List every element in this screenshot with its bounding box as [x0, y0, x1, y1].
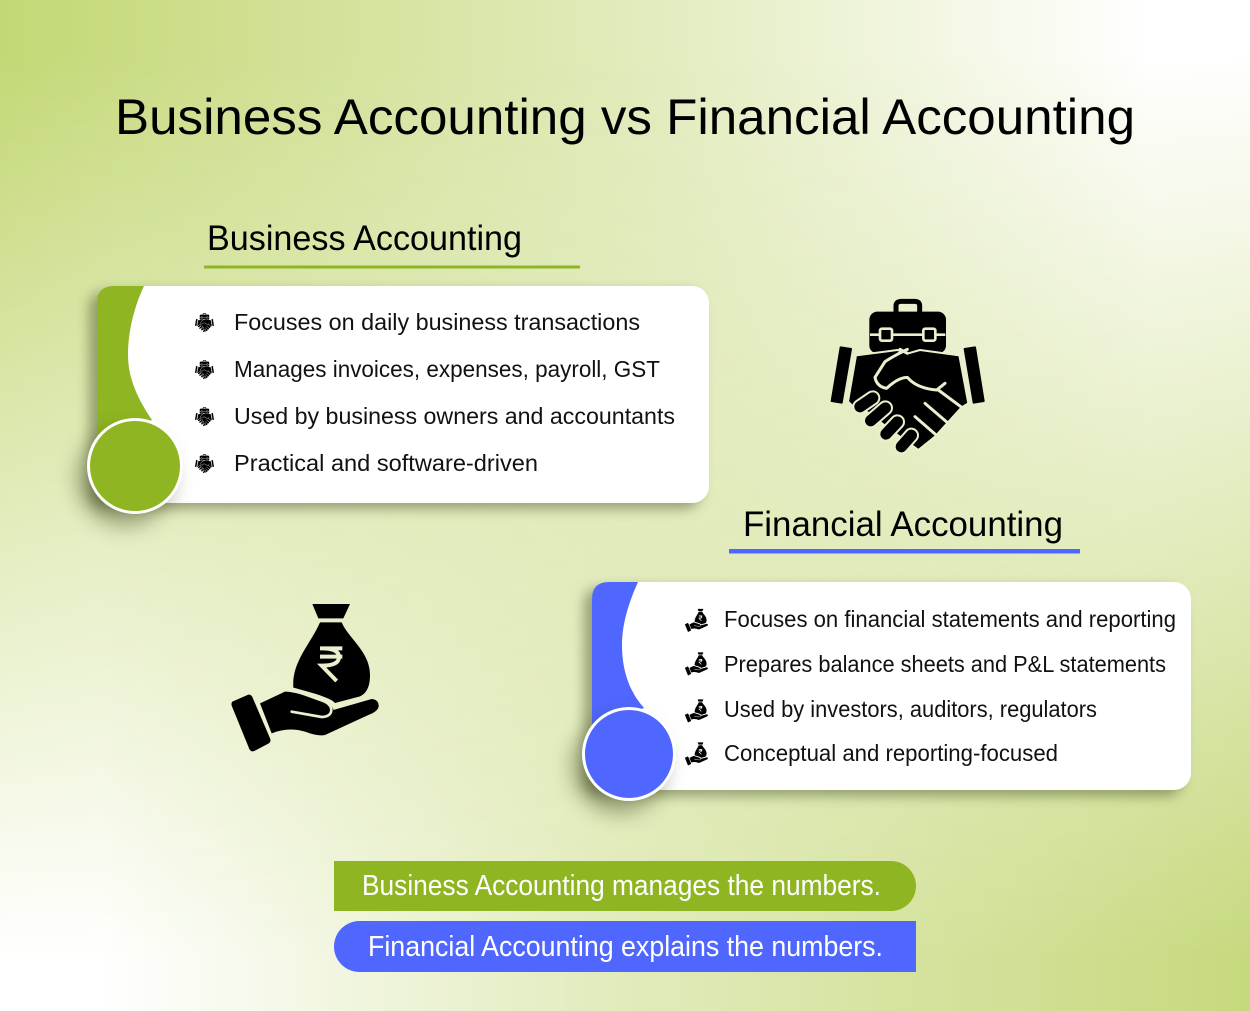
bullet list: Manages invoices, expenses, payroll, GST: [234, 356, 660, 382]
bullet list: Used by investors, auditors, regulators: [724, 696, 1097, 722]
bullet list: Prepares balance sheets and P&L statements: [724, 651, 1166, 677]
heading: business accounting: Business Accounting: [207, 219, 522, 258]
bullet list: Practical and software-driven: [234, 450, 538, 476]
panel: financial accounting: [584, 582, 1191, 800]
callout: financial accounting explains: Financial Accounting explains the numbers.: [368, 931, 883, 963]
callout: financial accounting explains: [334, 921, 916, 972]
callout: business accounting manages: Business Accounting manages the numbers.: [362, 870, 881, 902]
bullet list: Focuses on financial statements and reporting: [724, 606, 1176, 632]
icon: handshake and briefcase: [832, 301, 984, 450]
circle badge: [88, 420, 182, 512]
title: Business Accounting vs Financial Accounting: [115, 89, 1135, 145]
bullet list: Conceptual and reporting-focused: [724, 740, 1058, 766]
callout: business accounting manages: [334, 861, 916, 911]
bullet list: [195, 309, 675, 476]
bullet list: Used by business owners and accountants: [234, 403, 675, 429]
icon: hand holding rupee bag: [231, 604, 379, 751]
heading: business accounting: [204, 219, 580, 268]
heading: financial accounting: Financial Accounting: [743, 505, 1063, 544]
panel: business accounting: [88, 286, 709, 512]
bullet list: [685, 606, 1176, 766]
circle badge: [584, 708, 674, 800]
bullet list: Focuses on daily business transactions: [234, 309, 640, 335]
